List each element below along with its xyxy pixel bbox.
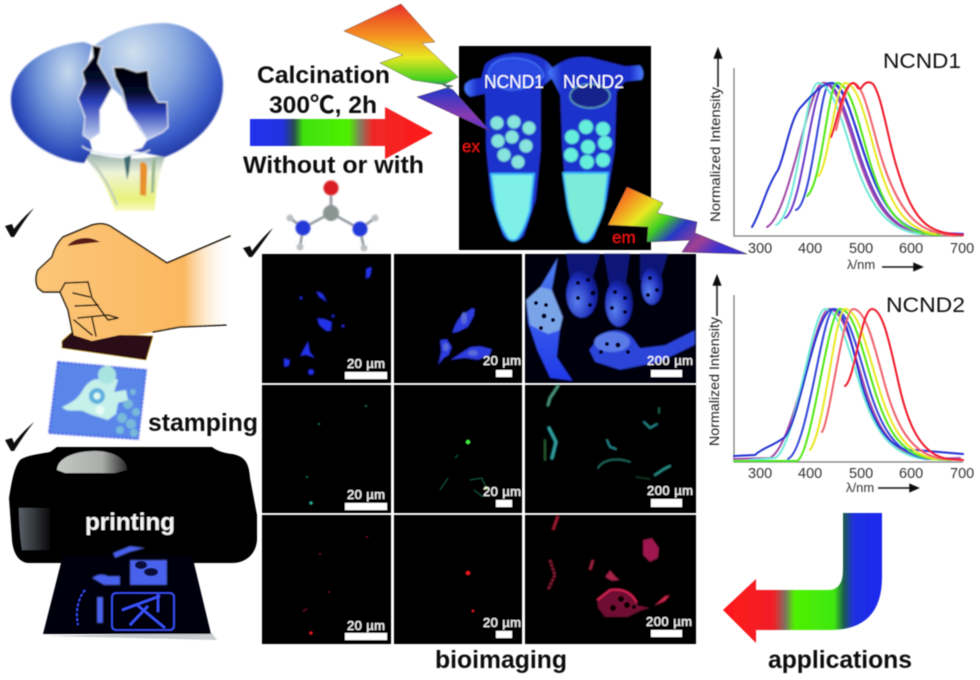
photo: fluorescent sample tubes	[459, 46, 651, 250]
chart title: NCND2	[886, 294, 965, 317]
y axis arrow	[714, 49, 722, 87]
applications label: applications	[768, 646, 912, 674]
x tick labels	[748, 466, 974, 482]
y axis arrow	[714, 276, 720, 316]
em label: em	[612, 228, 636, 247]
tube NCND1	[464, 53, 556, 241]
scale bar: 200 µm	[646, 614, 692, 629]
panel: blue cells wide field	[262, 254, 391, 383]
scale bar: 20 µm	[347, 356, 385, 371]
x tick labels: 400	[798, 241, 822, 257]
axes	[734, 295, 963, 462]
scale bar	[647, 353, 693, 377]
scale bar	[646, 614, 692, 637]
scale bar: 200 µm	[647, 483, 693, 498]
x tick labels: 600	[899, 466, 923, 482]
hand outline	[36, 224, 230, 336]
icon: urea molecule	[286, 180, 378, 252]
tube NCND2	[548, 57, 644, 243]
x tick labels: 500	[849, 466, 873, 482]
panel: green cells close up	[394, 385, 522, 513]
y axis label: Normalized Intensity	[706, 317, 722, 446]
panel: green cells wide field	[262, 385, 391, 513]
panel: red cells wide field	[262, 515, 391, 644]
tube label NCND2: NCND2	[563, 72, 624, 92]
microscopy image grid	[262, 254, 696, 644]
x tick labels: 500	[849, 241, 873, 257]
chart title: NCND1	[883, 50, 961, 73]
y axis label: Normalized Intensity	[707, 87, 723, 222]
x axis label: λ/nm	[846, 480, 874, 495]
hand shape	[36, 224, 232, 341]
icon: check mark one	[5, 208, 34, 237]
calcination heading	[257, 62, 390, 119]
scale bar: 20 µm	[347, 618, 385, 633]
scale bar: 20 µm	[347, 487, 385, 502]
x tick labels: 300	[748, 241, 772, 257]
arrow: rainbow calcination arrow	[250, 107, 433, 159]
ex label: ex	[462, 137, 480, 156]
bioimaging label: bioimaging	[435, 646, 567, 674]
stamped fluorescent paper	[49, 362, 146, 439]
process name: Calcination	[257, 62, 390, 89]
panel: red cells close up	[394, 515, 522, 644]
x axis label: λ/nm	[847, 257, 875, 272]
icon: hand pressing stamp	[36, 224, 232, 360]
x tick labels	[748, 241, 974, 257]
icon: check mark two	[5, 422, 34, 451]
printed paper	[43, 555, 211, 634]
chart: NCND1 spectra	[707, 49, 974, 272]
finger nail shadow	[68, 238, 100, 246]
chart: NCND2 spectra	[706, 276, 974, 495]
scale bar: 200 µm	[647, 353, 693, 368]
printer body	[9, 447, 257, 563]
x axis arrow	[882, 264, 922, 270]
arrow: bent rainbow arrow	[723, 513, 882, 643]
spectra curves	[752, 82, 963, 236]
scale bar: 20 µm	[483, 615, 521, 630]
printing label: printing	[85, 509, 175, 536]
icon: check mark three	[243, 228, 273, 257]
icon: printer with printed paper	[9, 447, 257, 640]
spectra curves	[734, 309, 963, 461]
scale bar	[647, 483, 693, 507]
panel: green tissue	[525, 385, 696, 513]
x tick labels: 700	[950, 466, 974, 482]
without or with label: Without or with	[243, 152, 424, 179]
x tick labels: 400	[798, 466, 822, 482]
panel: red tissue	[525, 515, 696, 644]
scale bar: 20 µm	[483, 484, 521, 499]
stamping label: stamping	[148, 409, 258, 437]
black background	[459, 46, 651, 250]
x tick labels: 600	[899, 241, 923, 257]
icon: cracked egg shell	[11, 23, 223, 211]
paper shadow	[46, 632, 217, 640]
scale bar: 20 µm	[483, 353, 521, 368]
printed patterns	[92, 546, 167, 623]
panel: blue tissue	[525, 254, 696, 383]
x tick labels: 700	[950, 241, 974, 257]
x tick labels: 300	[748, 466, 772, 482]
process conditions: 300℃, 2h	[269, 92, 377, 119]
icon: emission lightning bolt	[608, 187, 747, 254]
printer dome	[57, 451, 127, 473]
tube label NCND1: NCND1	[484, 72, 544, 92]
axes	[734, 68, 963, 236]
icon: excitation lightning bolt	[344, 4, 490, 131]
panel: blue cells close up	[394, 254, 522, 383]
printer front highlight	[19, 508, 50, 550]
x axis arrow	[878, 484, 918, 492]
stamp block	[62, 332, 153, 360]
